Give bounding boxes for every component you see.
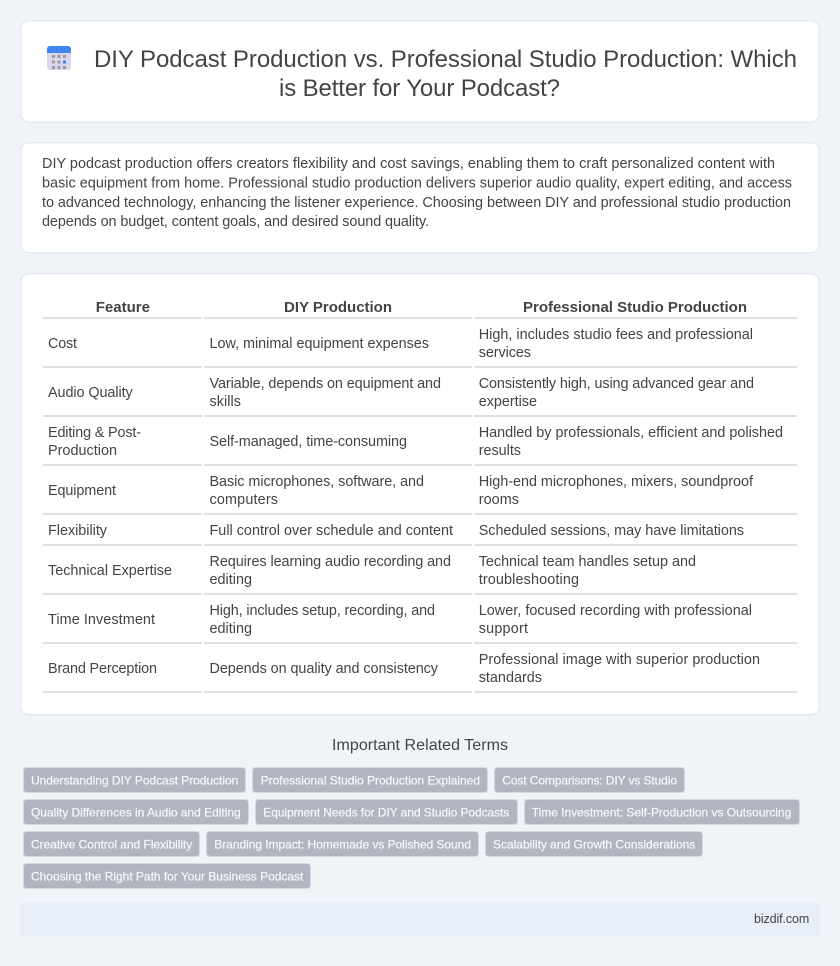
table header: Feature (96, 299, 150, 316)
row: brand perception (43, 652, 797, 693)
tag (24, 832, 200, 856)
row: audio quality: expertise (479, 394, 537, 410)
row: equipment (43, 474, 797, 515)
tag: Understanding DIY Podcast Production (31, 773, 238, 787)
table header: Professional Studio Production (523, 299, 747, 316)
row: time investment: support (479, 621, 528, 637)
row: technical expertise: Technical team handles setup and (479, 554, 696, 570)
title (94, 46, 797, 102)
icon: calendar grid (47, 46, 71, 70)
row: brand perception: standards (479, 670, 542, 686)
tag: Scalability and Growth Considerations (493, 837, 695, 851)
tag: Professional Studio Production Explained (261, 773, 480, 787)
title: DIY Podcast Production vs. Professional Studio Production: Which (94, 46, 797, 73)
tag (524, 800, 800, 824)
row: editing and post-production: Self-managed, time-consuming (210, 434, 407, 450)
tag cloud: related terms (24, 768, 800, 888)
row: technical expertise: Requires learning audio recording and (210, 554, 451, 570)
row: flexibility: Full control over schedule and content (210, 523, 453, 539)
row: editing and post-production: Handled by professionals, efficient and polished (479, 425, 783, 441)
tag (24, 864, 310, 888)
row: equipment: Equipment (48, 483, 116, 499)
row: audio quality: Audio Quality (48, 385, 133, 401)
row: cost: services (479, 345, 531, 361)
row: time investment: High, includes setup, recording, and (210, 603, 435, 619)
row: time investment: Lower, focused recording with professional (479, 603, 752, 619)
heading: important related terms: Important Related Terms (332, 737, 508, 754)
row: flexibility (43, 523, 797, 546)
row: brand perception: Professional image with superior production (479, 652, 760, 668)
table header (43, 299, 797, 319)
tag: Time Investment: Self-Production vs Outsourcing (532, 805, 791, 819)
tag (256, 800, 518, 824)
tag (486, 832, 702, 856)
row: cost: Cost (48, 336, 77, 352)
row: flexibility: Flexibility (48, 523, 108, 539)
row: editing and post-production: Production (48, 443, 117, 459)
intro text: basic equipment from home. Professional studio production delivers superior audio quality, expert editing, and access (42, 176, 792, 192)
footer (20, 902, 820, 936)
panel: introduction (21, 143, 819, 253)
row: equipment: Basic microphones, software, and (210, 474, 424, 490)
row: cost: High, includes studio fees and professional (479, 327, 753, 343)
tag: Choosing the Right Path for Your Business Podcast (31, 869, 304, 883)
row: technical expertise (43, 554, 797, 595)
row: equipment: computers (210, 492, 278, 508)
tag: Creative Control and Flexibility (31, 837, 192, 851)
row: editing and post-production (43, 425, 797, 466)
row: time investment: Time Investment (48, 612, 155, 628)
title: is Better for Your Podcast? (279, 75, 560, 102)
row: technical expertise: troubleshooting (479, 572, 579, 588)
row: brand perception: Depends on quality and consistency (210, 661, 439, 677)
tag: Quality Differences in Audio and Editing (31, 805, 241, 819)
row: time investment: editing (210, 621, 252, 637)
tag (206, 832, 478, 856)
intro text: to advanced technology, enhancing the listener experience. Choosing between DIY and professional studio production (42, 195, 791, 211)
tag (494, 768, 684, 792)
row: technical expertise: editing (210, 572, 252, 588)
table header: DIY Production (284, 299, 392, 316)
tag (24, 800, 248, 824)
row: cost: Low, minimal equipment expenses (210, 336, 429, 352)
row: audio quality: Variable, depends on equipment and (210, 376, 441, 392)
row: brand perception: Brand Perception (48, 661, 157, 677)
panel: comparison table (21, 274, 819, 715)
footer: bizdif.com (754, 912, 809, 926)
tag (24, 768, 246, 792)
tag: Branding Impact: Homemade vs Polished Sound (214, 837, 471, 851)
row: flexibility: Scheduled sessions, may have limitations (479, 523, 744, 539)
tag: Cost Comparisons: DIY vs Studio (502, 773, 677, 787)
row: audio quality: skills (210, 394, 241, 410)
row: cost (43, 327, 797, 368)
row: equipment: rooms (479, 492, 519, 508)
row: technical expertise: Technical Expertise (48, 563, 172, 579)
intro text: depends on budget, content goals, and desired sound quality. (42, 214, 429, 230)
panel: title card (21, 21, 819, 122)
row: equipment: High-end microphones, mixers, soundproof (479, 474, 754, 490)
row: audio quality: Consistently high, using advanced gear and (479, 376, 754, 392)
intro text (42, 156, 792, 230)
row: audio quality (43, 376, 797, 417)
tag (252, 768, 488, 792)
row: time investment (43, 603, 797, 644)
row: editing and post-production: results (479, 443, 521, 459)
tag: Equipment Needs for DIY and Studio Podcasts (263, 805, 509, 819)
row: editing and post-production: Editing & Post- (48, 425, 141, 441)
intro text: DIY podcast production offers creators flexibility and cost savings, enabling them to craft personalized content with (42, 156, 775, 172)
